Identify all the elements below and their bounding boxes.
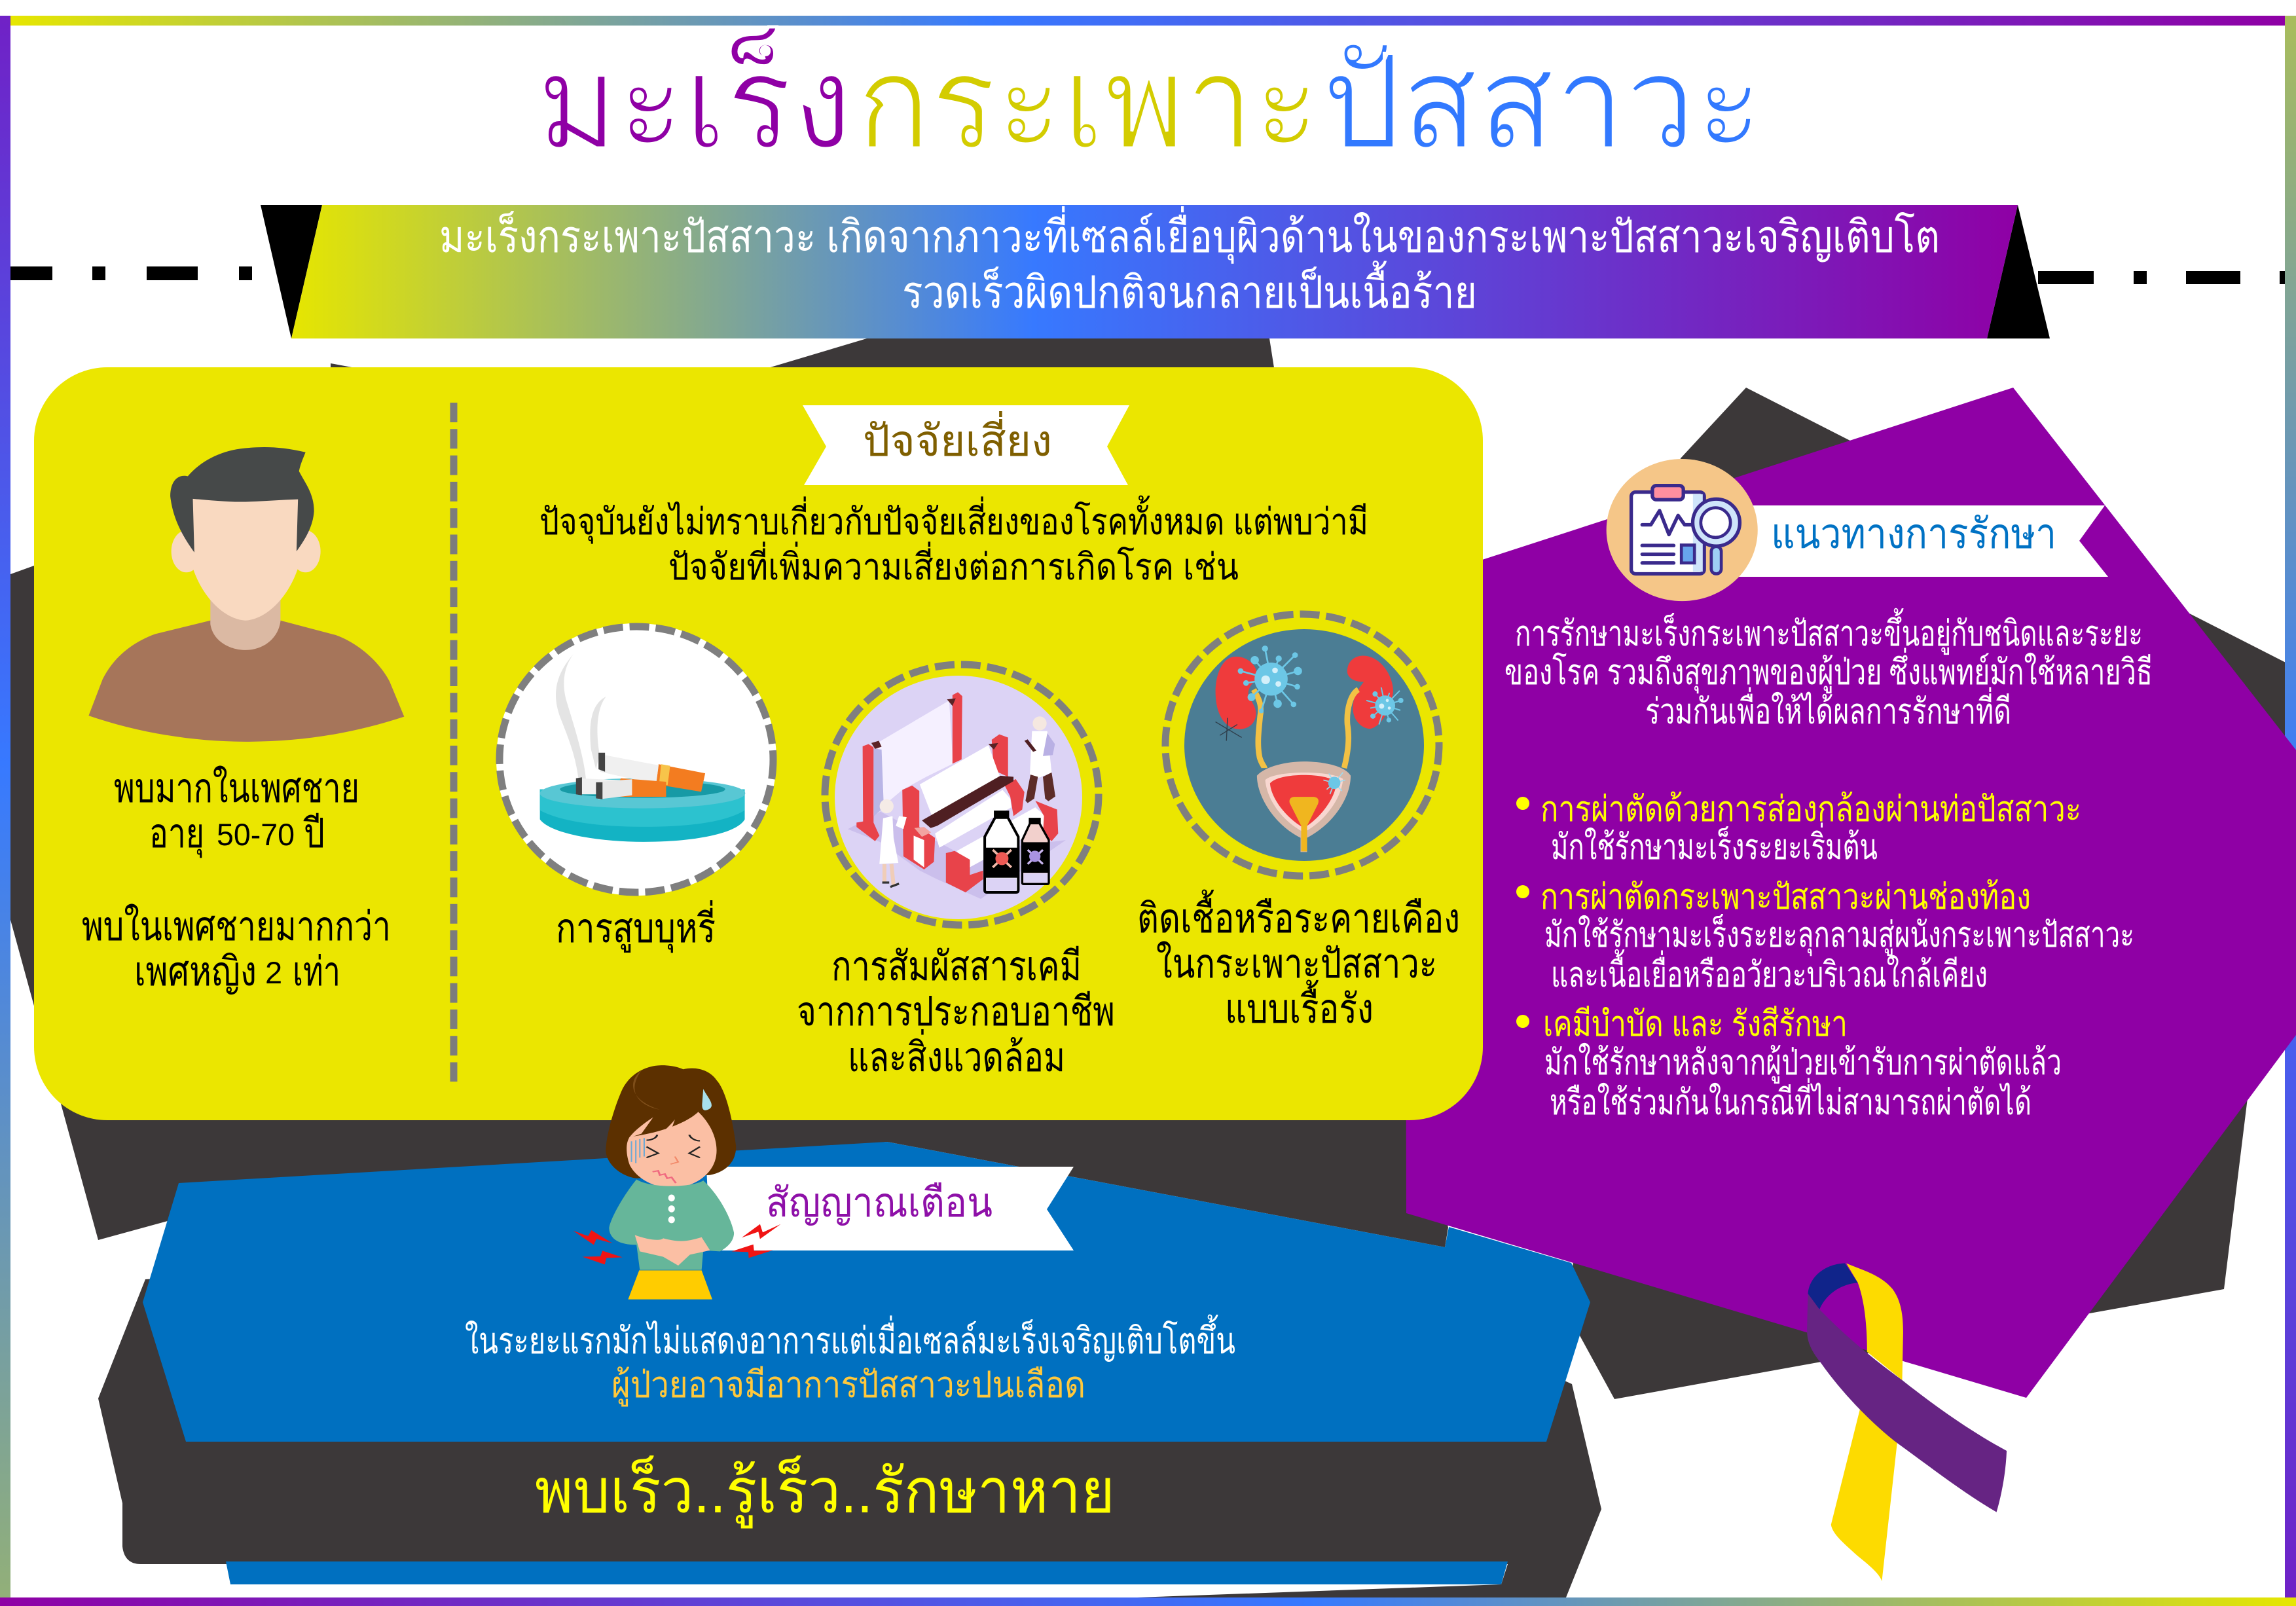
label: chronic irritation: ติดเชื้อหรือระคายเคือง bbox=[1137, 889, 1460, 941]
dashed line left bbox=[10, 266, 252, 280]
icon: cigarettes in ashtray bbox=[496, 623, 776, 896]
title: ปัสสาวะ bbox=[1322, 30, 1763, 176]
text: patient demographics: อายุ bbox=[149, 811, 204, 858]
treatment item: chemo and radiation: มักใช้รักษาหลังจากผู้ป่วยเข้ารับการผ่าตัดแล้ว bbox=[1544, 1042, 2062, 1084]
background: dark angular shapes bbox=[10, 338, 2296, 1597]
text: patient demographics: พบในเพศชายมากกว่า bbox=[82, 903, 391, 949]
text: patient demographics: พบมากในเพศชาย bbox=[114, 765, 359, 811]
icon: woman with stomach pain bbox=[573, 1065, 781, 1300]
text: risk intro: ปัจจัยที่เพิ่มความเสี่ยงต่อการเกิดโรค เช่น bbox=[668, 541, 1239, 587]
text: treatment intro bbox=[1504, 608, 2153, 731]
label: chemical exposure bbox=[797, 944, 1115, 1080]
label: smoking: การสูบบุหรี่ bbox=[556, 900, 716, 953]
icon: man bbox=[88, 447, 404, 742]
text: patient demographics bbox=[82, 765, 391, 995]
text: patient demographics: ปี bbox=[303, 811, 325, 856]
treatment item: abdominal surgery: และเนื้อเยื่อหรืออวัยวะบริเวณใกล้เคียง bbox=[1551, 949, 1988, 995]
label: chemical exposure: และสิ่งแวดล้อม bbox=[848, 1029, 1065, 1080]
label: chronic irritation: ในกระเพาะปัสสาวะ bbox=[1156, 941, 1437, 987]
treatment item: chemo and radiation bbox=[1516, 1004, 2062, 1122]
text: treatment intro: ร่วมกันเพื่อให้ได้ผลการรักษาที่ดี bbox=[1645, 687, 2011, 731]
text: warning signs: ผู้ป่วยอาจมีอาการปัสสาวะปนเลือด bbox=[611, 1364, 1085, 1407]
heading ribbon: risk factors bbox=[803, 405, 1129, 485]
panel: blue warning signs bbox=[143, 1142, 1590, 1584]
treatment item: abdominal surgery bbox=[1516, 877, 2134, 995]
panel: yellow risk factors bbox=[34, 367, 1483, 1120]
treatment item: chemo and radiation: เคมีบำบัด และ รังสีรักษา bbox=[1543, 1004, 1848, 1044]
text: risk intro bbox=[539, 496, 1368, 587]
label: chronic irritation bbox=[1137, 889, 1460, 1032]
heading ribbon: warning signs: สัญญาณเตือน bbox=[766, 1180, 993, 1226]
banner: definition: มะเร็งกระเพาะปัสสาวะ เกิดจากภาวะที่เซลล์เยื่อบุผิวด้านในของกระเพาะปัสสาวะเจริญเติบโต bbox=[439, 206, 1940, 264]
icon: chemical exposure bbox=[825, 665, 1099, 925]
treatment item: abdominal surgery: การผ่าตัดกระเพาะปัสสาวะผ่านช่องท้อง bbox=[1540, 877, 2031, 917]
text: patient demographics: 50-70 bbox=[217, 817, 295, 852]
label: chemical exposure: การสัมผัสสารเคมี bbox=[831, 944, 1082, 989]
label: chemical exposure: จากการประกอบอาชีพ bbox=[797, 989, 1115, 1034]
divider bbox=[450, 403, 457, 1082]
text: risk intro: ปัจจุบันยังไม่ทราบเกี่ยวกับปัจจัยเสี่ยงของโรคทั้งหมด แต่พบว่ามี bbox=[539, 496, 1368, 544]
slogan: พบเร็ว..รู้เร็ว..รักษาหาย bbox=[535, 1455, 1115, 1529]
treatment item: cystoscopic surgery: การผ่าตัดด้วยการส่องกล้องผ่านท่อปัสสาวะ bbox=[1540, 790, 2081, 829]
heading ribbon: warning signs bbox=[706, 1167, 1074, 1250]
heading ribbon: treatment bbox=[1696, 505, 2108, 577]
banner: definition: รวดเร็วผิดปกติจนกลายเป็นเนื้อร้าย bbox=[902, 261, 1477, 318]
text: warning signs: ในระยะแรกมักไม่แสดงอาการแต่เมื่อเซลล์มะเร็งเจริญเติบโตขึ้น bbox=[465, 1315, 1235, 1362]
panel: purple treatment bbox=[1405, 388, 2296, 1398]
banner: definition bbox=[261, 205, 2050, 338]
treatment item: cystoscopic surgery: มักใช้รักษามะเร็งระยะเริ่มต้น bbox=[1551, 822, 1878, 867]
treatment item: chemo and radiation: หรือใช้ร่วมกันในกรณีที่ไม่สามารถผ่าตัดได้ bbox=[1550, 1078, 2032, 1122]
text: patient demographics: เพศหญิง bbox=[134, 949, 257, 995]
title bbox=[537, 26, 1763, 176]
text: patient demographics: เท่า bbox=[293, 949, 340, 995]
text: warning signs bbox=[465, 1315, 1235, 1407]
title: กระเพาะ bbox=[856, 30, 1320, 176]
text: patient demographics: 2 bbox=[265, 955, 282, 990]
heading ribbon: treatment: แนวทางการรักษา bbox=[1771, 510, 2056, 557]
dashed line right bbox=[2038, 271, 2285, 284]
icon: awareness ribbon bbox=[1807, 1263, 2007, 1581]
title: มะเร็ง bbox=[537, 26, 852, 176]
label: chronic irritation: แบบเรื้อรัง bbox=[1225, 979, 1374, 1032]
treatment item: cystoscopic surgery bbox=[1516, 790, 2081, 867]
heading ribbon: risk factors: ปัจจัยเสี่ยง bbox=[863, 411, 1052, 465]
icon: clipboard and magnifier bbox=[1607, 459, 1758, 601]
icon: infected urinary tract bbox=[1165, 614, 1439, 876]
